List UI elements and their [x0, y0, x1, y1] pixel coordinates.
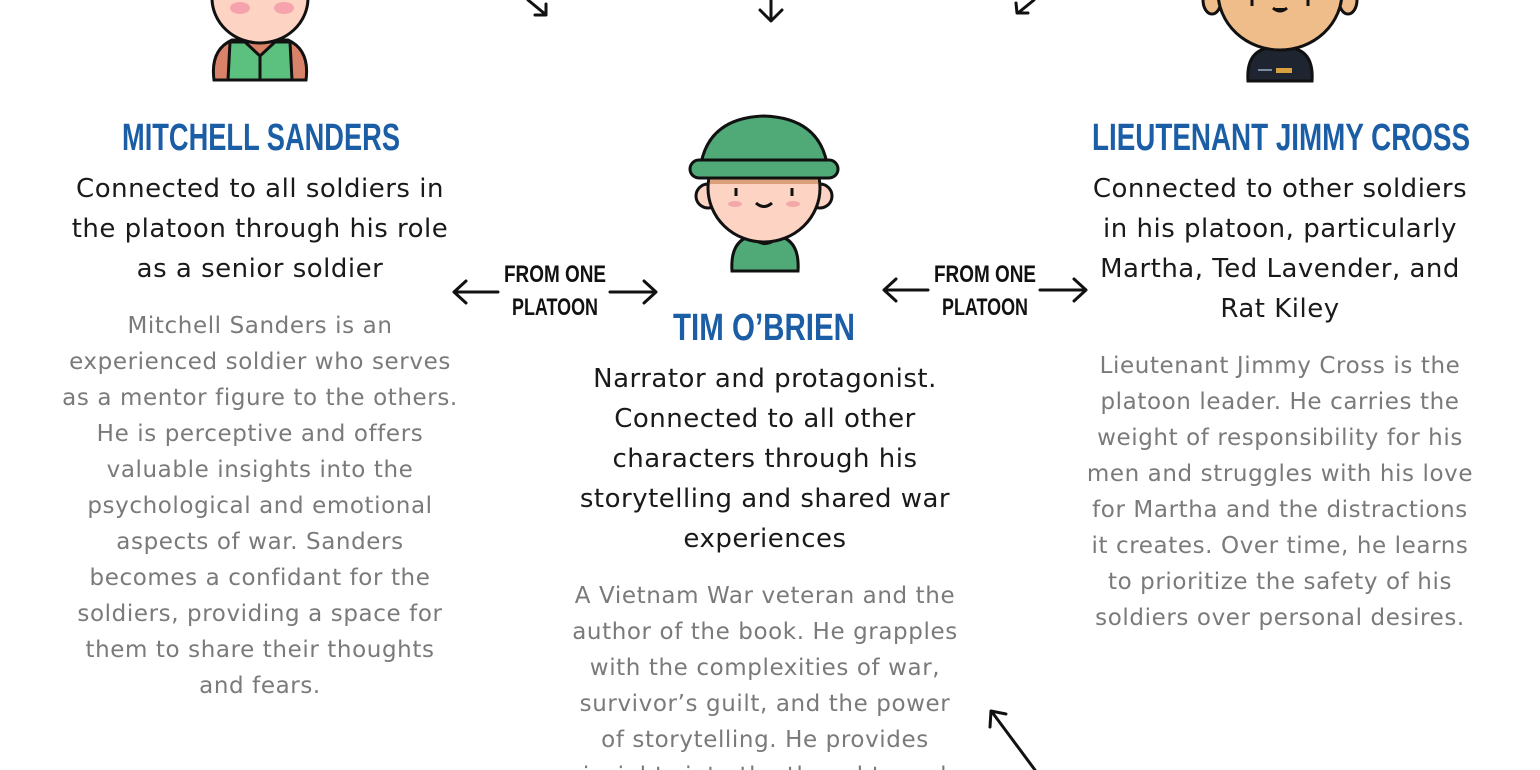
text: Mitchell connection — [72, 174, 448, 284]
text: Mitchell description: experienced soldier who serves — [69, 349, 451, 375]
text: Cross description: to prioritize the safety of his — [1108, 569, 1452, 595]
text: Mitchell description: psychological and emotional — [87, 493, 433, 519]
arrow: top center — [760, 0, 782, 21]
text: Mitchell description: and fears. — [199, 673, 321, 699]
heading: Tim O'Brien: TIM O’BRIEN — [673, 307, 855, 349]
text: Cross connection: Connected to other soldiers — [1093, 174, 1467, 204]
text: Tim description: with the complexities of war, — [590, 655, 940, 681]
text: Tim description: of storytelling. He provides — [601, 727, 929, 753]
text: Cross description: weight of responsibility for his — [1097, 425, 1463, 451]
text: Mitchell description: valuable insights into the — [107, 457, 413, 483]
text: Cross connection: Rat Kiley — [1220, 294, 1340, 324]
text: Tim connection: Narrator and protagonist. — [593, 364, 937, 394]
avatar: Lieutenant Jimmy Cross — [1203, 0, 1357, 81]
text: Cross description: soldiers over personal desires. — [1095, 605, 1465, 631]
text: Cross description: for Martha and the distractions — [1092, 497, 1468, 523]
text: Tim connection: storytelling and shared war — [580, 484, 950, 514]
label: from one platoon (left) — [454, 261, 656, 321]
text: Tim connection: characters through his — [612, 444, 918, 474]
text: Mitchell description: He is perceptive and offers — [97, 421, 423, 447]
text: Mitchell description: aspects of war. Sanders — [116, 529, 404, 555]
label: from one platoon (right): PLATOON — [942, 294, 1028, 321]
text: Tim description: A Vietnam War veteran and the — [575, 583, 955, 609]
arrow: top left — [528, 0, 546, 15]
text: Mitchell connection: Connected to all soldiers in — [76, 174, 444, 204]
label: from one platoon (right) — [884, 261, 1086, 321]
text: Mitchell connection: the platoon through his role — [72, 214, 448, 244]
text: Mitchell description: Mitchell Sanders is an — [127, 313, 393, 339]
text: Mitchell description: soldiers, providing a space for — [77, 601, 443, 627]
label: from one platoon (right): FROM ONE — [934, 261, 1036, 288]
avatar: Mitchell Sanders — [212, 0, 308, 80]
text: Cross description: Lieutenant Jimmy Cross is the — [1100, 353, 1460, 379]
text: Cross description: platoon leader. He carries the — [1100, 389, 1460, 415]
arrow: top right — [1016, 0, 1034, 13]
text: Tim connection — [580, 364, 950, 554]
text: Tim description: survivor’s guilt, and the power — [580, 691, 950, 717]
text: Cross description: men and struggles with his love — [1087, 461, 1473, 487]
avatar: Tim O'Brien — [690, 116, 838, 271]
text: Mitchell description: as a mentor figure to the others. — [62, 385, 458, 411]
text: Tim connection: experiences — [683, 524, 847, 554]
label: from one platoon (left): FROM ONE — [504, 261, 606, 288]
text: Tim description — [572, 583, 958, 770]
heading: Mitchell Sanders: MITCHELL SANDERS — [122, 117, 400, 159]
text: Cross connection: Martha, Ted Lavender, and — [1100, 254, 1460, 284]
text: Cross connection: in his platoon, particularly — [1103, 214, 1457, 244]
label: from one platoon (left): PLATOON — [512, 294, 598, 321]
text: Mitchell description: them to share their thoughts — [85, 637, 435, 663]
text: Cross connection — [1093, 174, 1467, 324]
text: Mitchell connection: as a senior soldier — [137, 254, 383, 284]
text: Tim description: author of the book. He grapples — [572, 619, 958, 645]
text: Tim connection: Connected to all other — [614, 404, 916, 434]
text: Mitchell description: becomes a confidant for the — [90, 565, 430, 591]
text: Cross description — [1087, 353, 1473, 631]
text: Mitchell description — [62, 313, 458, 699]
arrow: bottom right — [990, 711, 1035, 770]
text: Cross description: it creates. Over time, he learns — [1091, 533, 1469, 559]
